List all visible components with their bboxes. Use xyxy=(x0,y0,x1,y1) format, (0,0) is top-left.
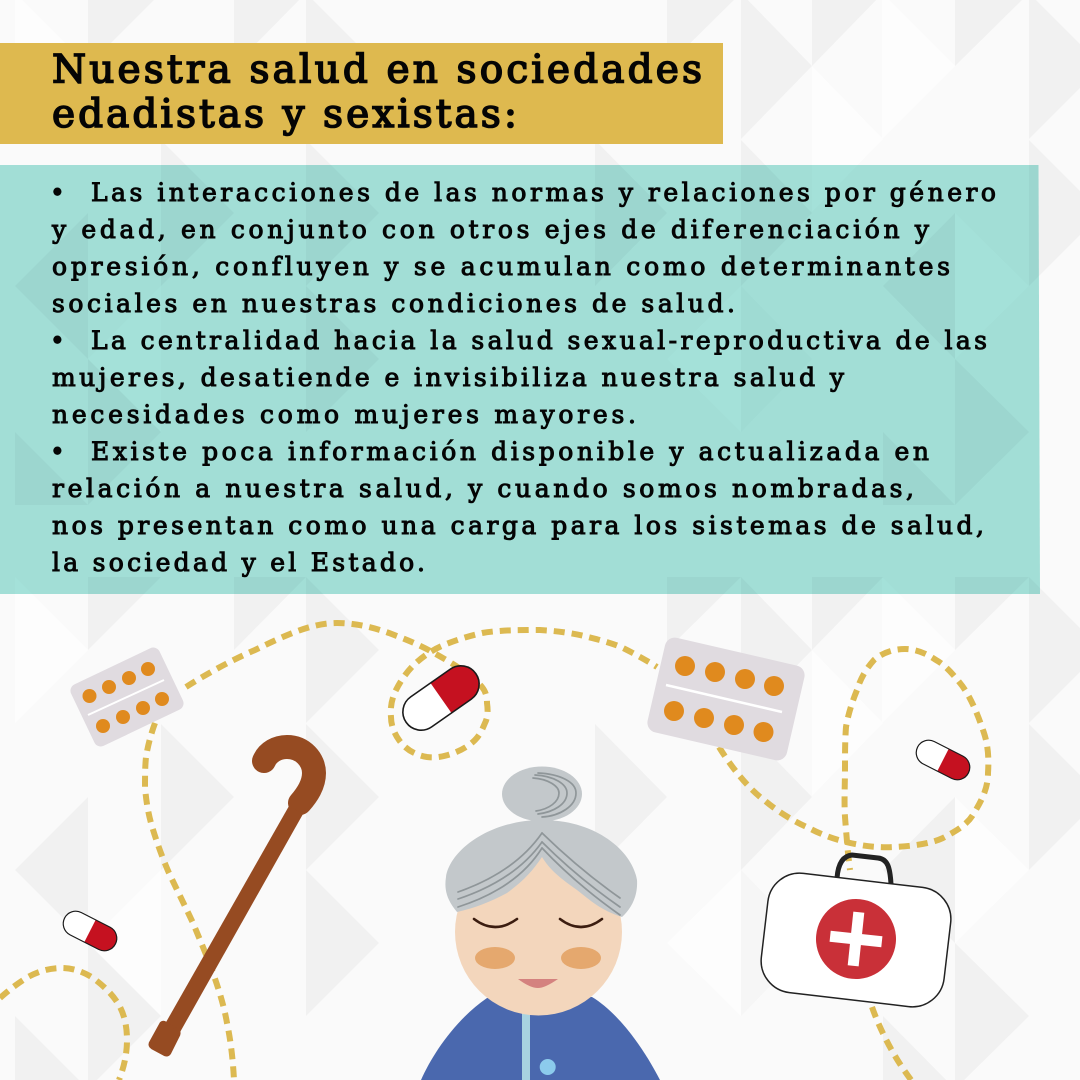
red cross badge xyxy=(812,895,900,983)
text block: third bullet: la sociedad y el Estado. xyxy=(52,548,425,577)
teal panel xyxy=(0,165,1040,594)
icon: small pill blister xyxy=(68,645,186,749)
text block: second bullet: La centralidad hacia la salud sexual-reproductiva de las xyxy=(91,326,987,355)
dashed paths xyxy=(0,623,988,1080)
icon: small capsule right xyxy=(912,736,974,784)
hair bun xyxy=(502,766,582,822)
text block: first bullet xyxy=(50,178,996,318)
text block: third bullet: nos presentan como una carga para los sistemas de salud, xyxy=(52,511,984,540)
icon: large pill blister xyxy=(645,636,807,762)
zipper xyxy=(522,1012,530,1080)
text block: second bullet: • xyxy=(50,326,65,355)
mouth xyxy=(518,979,558,988)
text block: third bullet: Existe poca información disponible y actualizada en xyxy=(91,437,929,466)
hair xyxy=(445,820,637,917)
title bar xyxy=(0,43,723,144)
text block: second bullet: necesidades como mujeres mayores. xyxy=(52,400,636,429)
text block: second bullet xyxy=(50,326,987,429)
icon: large capsule xyxy=(396,659,486,737)
text block: first bullet: sociales en nuestras condiciones de salud. xyxy=(52,289,735,318)
kit case xyxy=(758,870,954,1010)
text block: first bullet: opresión, confluyen y se acumulan como determinantes xyxy=(52,252,950,281)
text block: third bullet xyxy=(50,437,984,577)
illustration: grandmother xyxy=(421,766,660,1080)
icon: small capsule left xyxy=(59,907,121,955)
text block: first bullet: • xyxy=(50,178,65,207)
text block: third bullet: • xyxy=(50,437,65,466)
text block: first bullet: Las interacciones de las normas y relaciones por género xyxy=(91,178,996,207)
text block: third bullet: relación a nuestra salud, y cuando somos nombradas, xyxy=(52,474,914,503)
icon: first aid kit xyxy=(758,855,954,1010)
button xyxy=(540,1059,556,1075)
text block: second bullet: mujeres, desatiende e invisibiliza nuestra salud y xyxy=(52,363,845,392)
kit handle xyxy=(837,855,891,884)
title xyxy=(52,48,702,137)
face xyxy=(455,848,622,1016)
title: edadistas y sexistas: xyxy=(52,92,517,137)
text block: first bullet: y edad, en conjunto con otros ejes de diferenciación y xyxy=(51,215,930,244)
eyes xyxy=(474,919,602,927)
cheeks xyxy=(475,947,601,969)
icon: walking cane xyxy=(150,747,314,1055)
title: Nuestra salud en sociedades xyxy=(52,48,702,92)
body xyxy=(421,997,660,1080)
